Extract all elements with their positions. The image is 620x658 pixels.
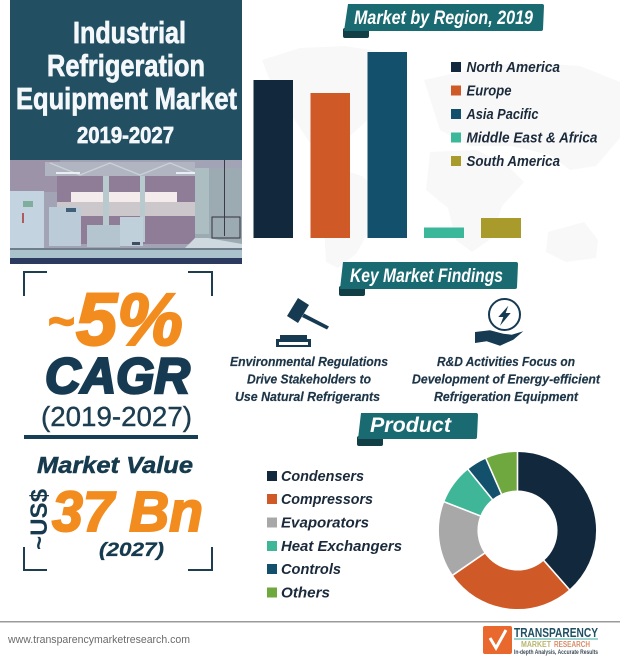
finding 2 text: R&D Activities Focus on xyxy=(437,354,575,369)
banner: Product: Product xyxy=(370,414,452,437)
market value label: Market Value xyxy=(37,452,193,478)
finding 2 text: Refrigeration Equipment xyxy=(434,389,579,404)
legend: regions: Middle East & Africa xyxy=(466,130,598,146)
finding 1 text xyxy=(230,354,388,404)
currency label: ~US$ xyxy=(26,488,53,550)
legend: regions: Asia Pacific xyxy=(466,106,539,123)
legend: products: Condensers xyxy=(281,468,364,485)
CAGR period: (2019-2027) xyxy=(41,401,192,432)
finding 1 text: Drive Stakeholders to xyxy=(247,372,371,386)
CAGR label: CAGR xyxy=(45,348,190,404)
finding 2 text xyxy=(412,354,601,404)
market value year: (2027) xyxy=(99,540,164,561)
banner: Product xyxy=(357,413,478,446)
banner: Key Market Findings: Key Market Findings xyxy=(350,266,503,287)
logo: MARKET xyxy=(521,640,551,649)
legend: products: Controls xyxy=(281,561,341,578)
title text: Equipment Market xyxy=(16,81,237,116)
icon: energy in hand xyxy=(475,299,523,346)
legend: regions: North America xyxy=(466,59,560,76)
legend: products: Heat Exchangers xyxy=(281,538,402,555)
legend: regions: South America xyxy=(466,153,560,170)
CAGR value: 5% xyxy=(76,278,183,361)
title text xyxy=(16,15,237,148)
footer xyxy=(0,621,620,656)
legend: regions xyxy=(451,59,598,170)
finding 2 text: Development of Energy-efficient xyxy=(412,372,601,386)
legend: regions: Europe xyxy=(466,82,512,100)
website url: www.transparencymarketresearch.com xyxy=(7,634,190,646)
photo: refrigeration equipment hall xyxy=(10,160,242,264)
logo xyxy=(483,625,598,656)
title text: 2019-2027 xyxy=(77,122,174,148)
legend: products: Compressors xyxy=(281,491,373,508)
logo: TRANSPARENCY xyxy=(514,625,598,640)
banner: Market by Region xyxy=(343,4,544,38)
donut chart: product share xyxy=(434,447,601,614)
CAGR panel xyxy=(24,272,212,570)
title text: Refrigeration xyxy=(47,48,205,83)
legend: products: Evaporators xyxy=(281,514,369,532)
title panel xyxy=(10,0,242,161)
finding 1 text: Environmental Regulations xyxy=(230,354,388,369)
logo: RESEARCH xyxy=(554,640,590,649)
CAGR value: ~ xyxy=(48,293,75,349)
title text: Industrial xyxy=(73,15,186,50)
world map background xyxy=(262,46,620,268)
legend: products: Others xyxy=(281,584,330,602)
market value figure: 37 Bn xyxy=(52,480,203,544)
banner: Market by Region: Market by Region, 2019 xyxy=(354,8,533,29)
bar chart: market by region xyxy=(254,52,521,238)
corner brackets xyxy=(24,272,212,570)
legend: products xyxy=(267,468,402,602)
icon: gavel xyxy=(276,298,329,347)
finding 1 text: Use Natural Refrigerants xyxy=(235,389,380,404)
banner: Key Market Findings xyxy=(339,262,518,296)
